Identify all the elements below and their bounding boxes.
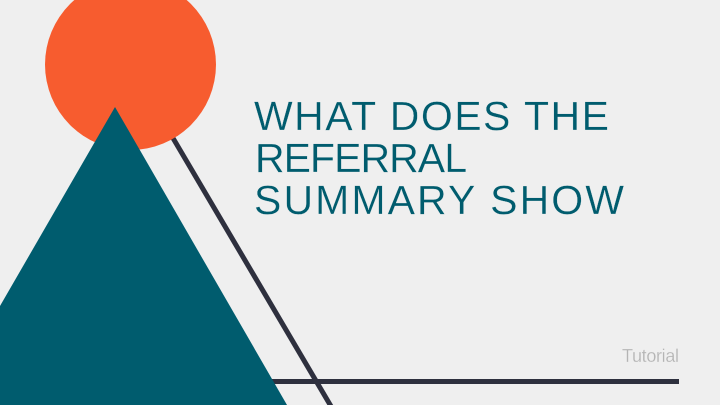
label: Tutorial: Tutorial [622,346,679,366]
title line 3: SUMMARY SHOW [254,177,624,223]
orange circle [45,0,216,150]
title line 1: WHAT DOES THE [254,93,609,139]
title line 2: REFERRAL [255,135,467,181]
teal triangle [0,107,287,405]
diagonal dark line [170,133,332,405]
title [254,93,624,223]
horizontal dark line [262,379,679,384]
